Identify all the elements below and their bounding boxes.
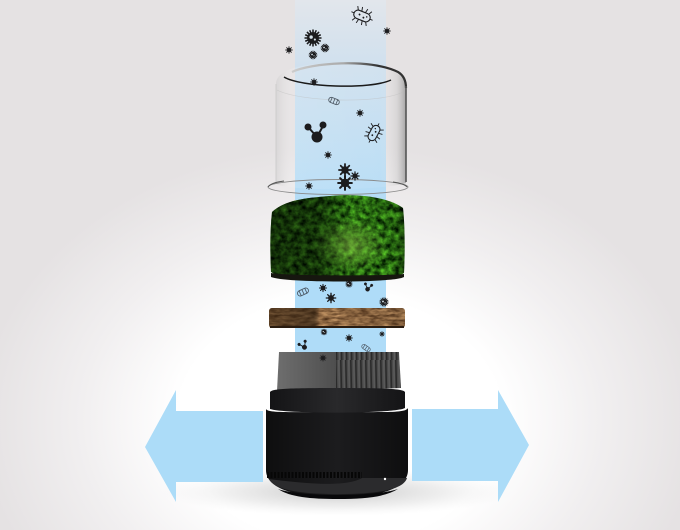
purifier base xyxy=(266,388,408,499)
lower air column xyxy=(295,278,386,356)
particles below the moss xyxy=(297,280,389,307)
left airflow arrow xyxy=(145,390,263,502)
cork layer xyxy=(269,308,405,328)
carbon filter layer xyxy=(277,352,401,391)
particles above the glass xyxy=(286,4,390,59)
particles below the cork xyxy=(297,329,384,352)
air column xyxy=(295,0,386,200)
right airflow arrow xyxy=(412,390,529,502)
glass cylinder xyxy=(268,63,408,194)
moss layer xyxy=(270,195,405,282)
particles inside the glass xyxy=(305,79,386,190)
floor shadow xyxy=(162,468,512,516)
